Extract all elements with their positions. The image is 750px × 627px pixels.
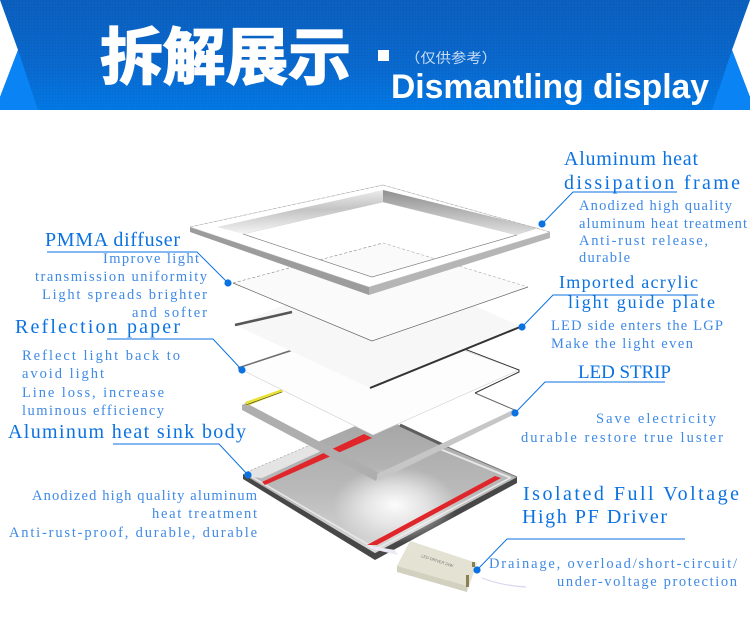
callout: LED STRIP (511, 362, 723, 446)
callout: Reflection paper: Reflection paper (15, 316, 180, 338)
callout: Aluminum heat sink body (8, 421, 258, 541)
callout: Aluminum heat dissipation frame: Aluminum heat (564, 148, 698, 170)
callout: Isolated Full Voltage High PF Driver: High PF Driver (522, 506, 667, 528)
callout: Aluminum heat dissipation frame (538, 148, 747, 266)
subtitle: English: Dismantling display (391, 68, 709, 106)
callout: Reflection paper: Line loss, increase (22, 385, 164, 401)
callout: Aluminum heat sink body: heat treatment (152, 506, 257, 522)
LED driver box: LED DRIVER 24W (421, 553, 454, 568)
callout: Imported acrylic light guide plate: LED side enters the LGP (551, 318, 723, 334)
callout: PMMA diffuser: transmission uniformity (35, 269, 208, 285)
callout: Imported acrylic light guide plate (518, 272, 723, 352)
callout: Aluminum heat dissipation frame: dissipation frame (564, 172, 740, 194)
callout: Aluminum heat sink body: Aluminum heat sink body (8, 421, 246, 443)
title: Chinese: 拆解展示 (100, 24, 351, 93)
callout: Isolated Full Voltage High PF Driver (473, 483, 739, 590)
callout: Imported acrylic light guide plate: Make the light even (551, 336, 694, 352)
callout: PMMA diffuser (35, 229, 232, 321)
callout: Isolated Full Voltage High PF Driver: Drainage, overload/short-circuit/ (489, 556, 738, 572)
header square bullet (378, 50, 389, 61)
callout: Reflection paper: avoid light (22, 366, 104, 382)
layer: light guide plate (235, 265, 520, 388)
callout: PMMA diffuser: and softer (132, 305, 207, 321)
layer: LED strip frame (242, 389, 517, 481)
callout: Isolated Full Voltage High PF Driver: under-voltage protection (557, 574, 738, 590)
callout: Reflection paper (15, 316, 246, 419)
callout: LED STRIP: durable restore true luster (521, 430, 723, 446)
LED driver box (397, 541, 526, 592)
callout: LED STRIP: LED STRIP (578, 362, 671, 383)
header banner (0, 0, 750, 110)
layer: aluminum frame (190, 185, 550, 295)
callout: PMMA diffuser: Improve light (103, 251, 199, 267)
layer: reflection paper (238, 322, 519, 435)
callout: Reflection paper: Reflect light back to (22, 348, 180, 364)
callout: Isolated Full Voltage High PF Driver: Isolated Full Voltage (523, 483, 739, 505)
callout: Aluminum heat sink body: Anodized high quality aluminum (32, 488, 258, 504)
callout: Aluminum heat dissipation frame: aluminum heat treatment (579, 216, 747, 232)
callout: Imported acrylic light guide plate: Imported acrylic (559, 272, 698, 292)
callout: Reflection paper: luminous efficiency (22, 403, 165, 419)
callout: LED STRIP: Save electricity (596, 411, 717, 427)
callout: Aluminum heat sink body: Anti-rust-proof, durable, durable (9, 525, 257, 541)
callout: Imported acrylic light guide plate: light guide plate (568, 292, 715, 312)
callout: Aluminum heat dissipation frame: Anodized high quality (579, 198, 733, 214)
exploded panel illustration (190, 185, 550, 592)
header note: （仅供参考） (405, 50, 497, 66)
callout: PMMA diffuser: PMMA diffuser (45, 229, 180, 251)
layer: PMMA diffuser (233, 243, 528, 341)
callout: Aluminum heat dissipation frame: durable (579, 250, 630, 266)
layer: aluminum heat sink body (243, 416, 517, 560)
callout: PMMA diffuser: Light spreads brighter (42, 287, 207, 303)
callout: Aluminum heat dissipation frame: Anti-rust release, (579, 233, 708, 249)
